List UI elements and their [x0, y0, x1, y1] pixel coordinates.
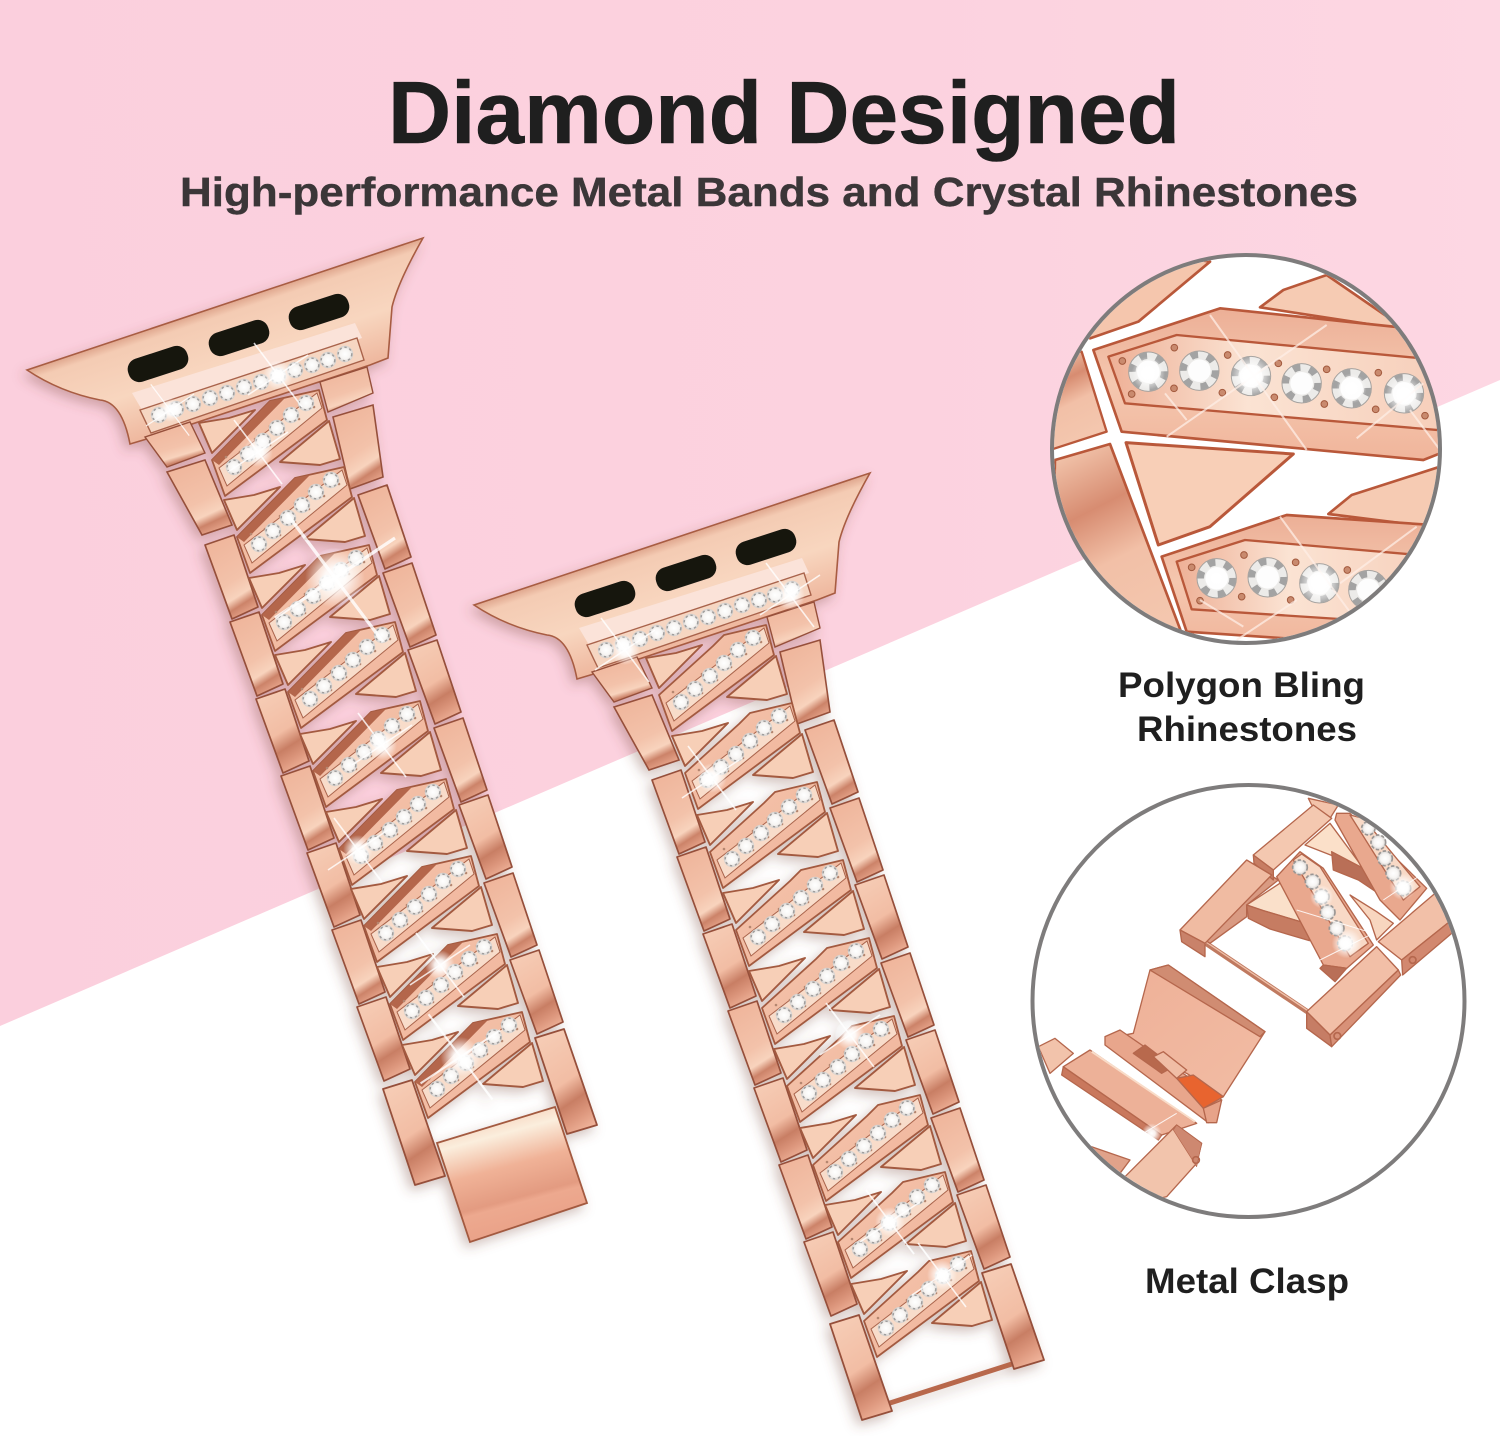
lug adapter with pin holes and rhinestone row [474, 473, 870, 702]
background: white diagonal lower panel [0, 380, 1500, 1436]
label: polygon bling rhinestones: Polygon Bling [1118, 666, 1365, 705]
label: polygon bling rhinestones [1118, 666, 1365, 749]
sparkles [146, 343, 500, 1099]
fold-over clasp cover [437, 1107, 587, 1242]
sparkles [595, 563, 972, 1307]
subtitle: High-performance Metal Bands and Crystal Rhinestones [180, 169, 1358, 215]
label: metal clasp: Metal Clasp [1145, 1262, 1349, 1301]
zoomed band artwork [1054, 260, 1438, 640]
right watch band with pin end [474, 473, 1044, 1420]
label: polygon bling rhinestones: Rhinestones [1137, 710, 1357, 749]
end spring pin [890, 1363, 1015, 1403]
left watch band with clasp [27, 238, 597, 1242]
circle outline [1032, 785, 1464, 1217]
outer metal links [167, 405, 597, 1185]
circle outline [1052, 255, 1440, 643]
detail circle: polygon bling rhinestones [1050, 253, 1442, 645]
zoomed clasp artwork [1038, 798, 1452, 1200]
detail circle: metal clasp [1032, 785, 1464, 1217]
circle interior [1032, 785, 1464, 1217]
circle interior [1052, 255, 1440, 643]
diagonal rhinestone bars [199, 390, 543, 1118]
lug adapter with pin holes and rhinestone row [27, 238, 423, 467]
outer metal links [614, 640, 1044, 1420]
diagonal rhinestone bars [646, 625, 992, 1357]
title: Diamond Designed [388, 63, 1180, 162]
